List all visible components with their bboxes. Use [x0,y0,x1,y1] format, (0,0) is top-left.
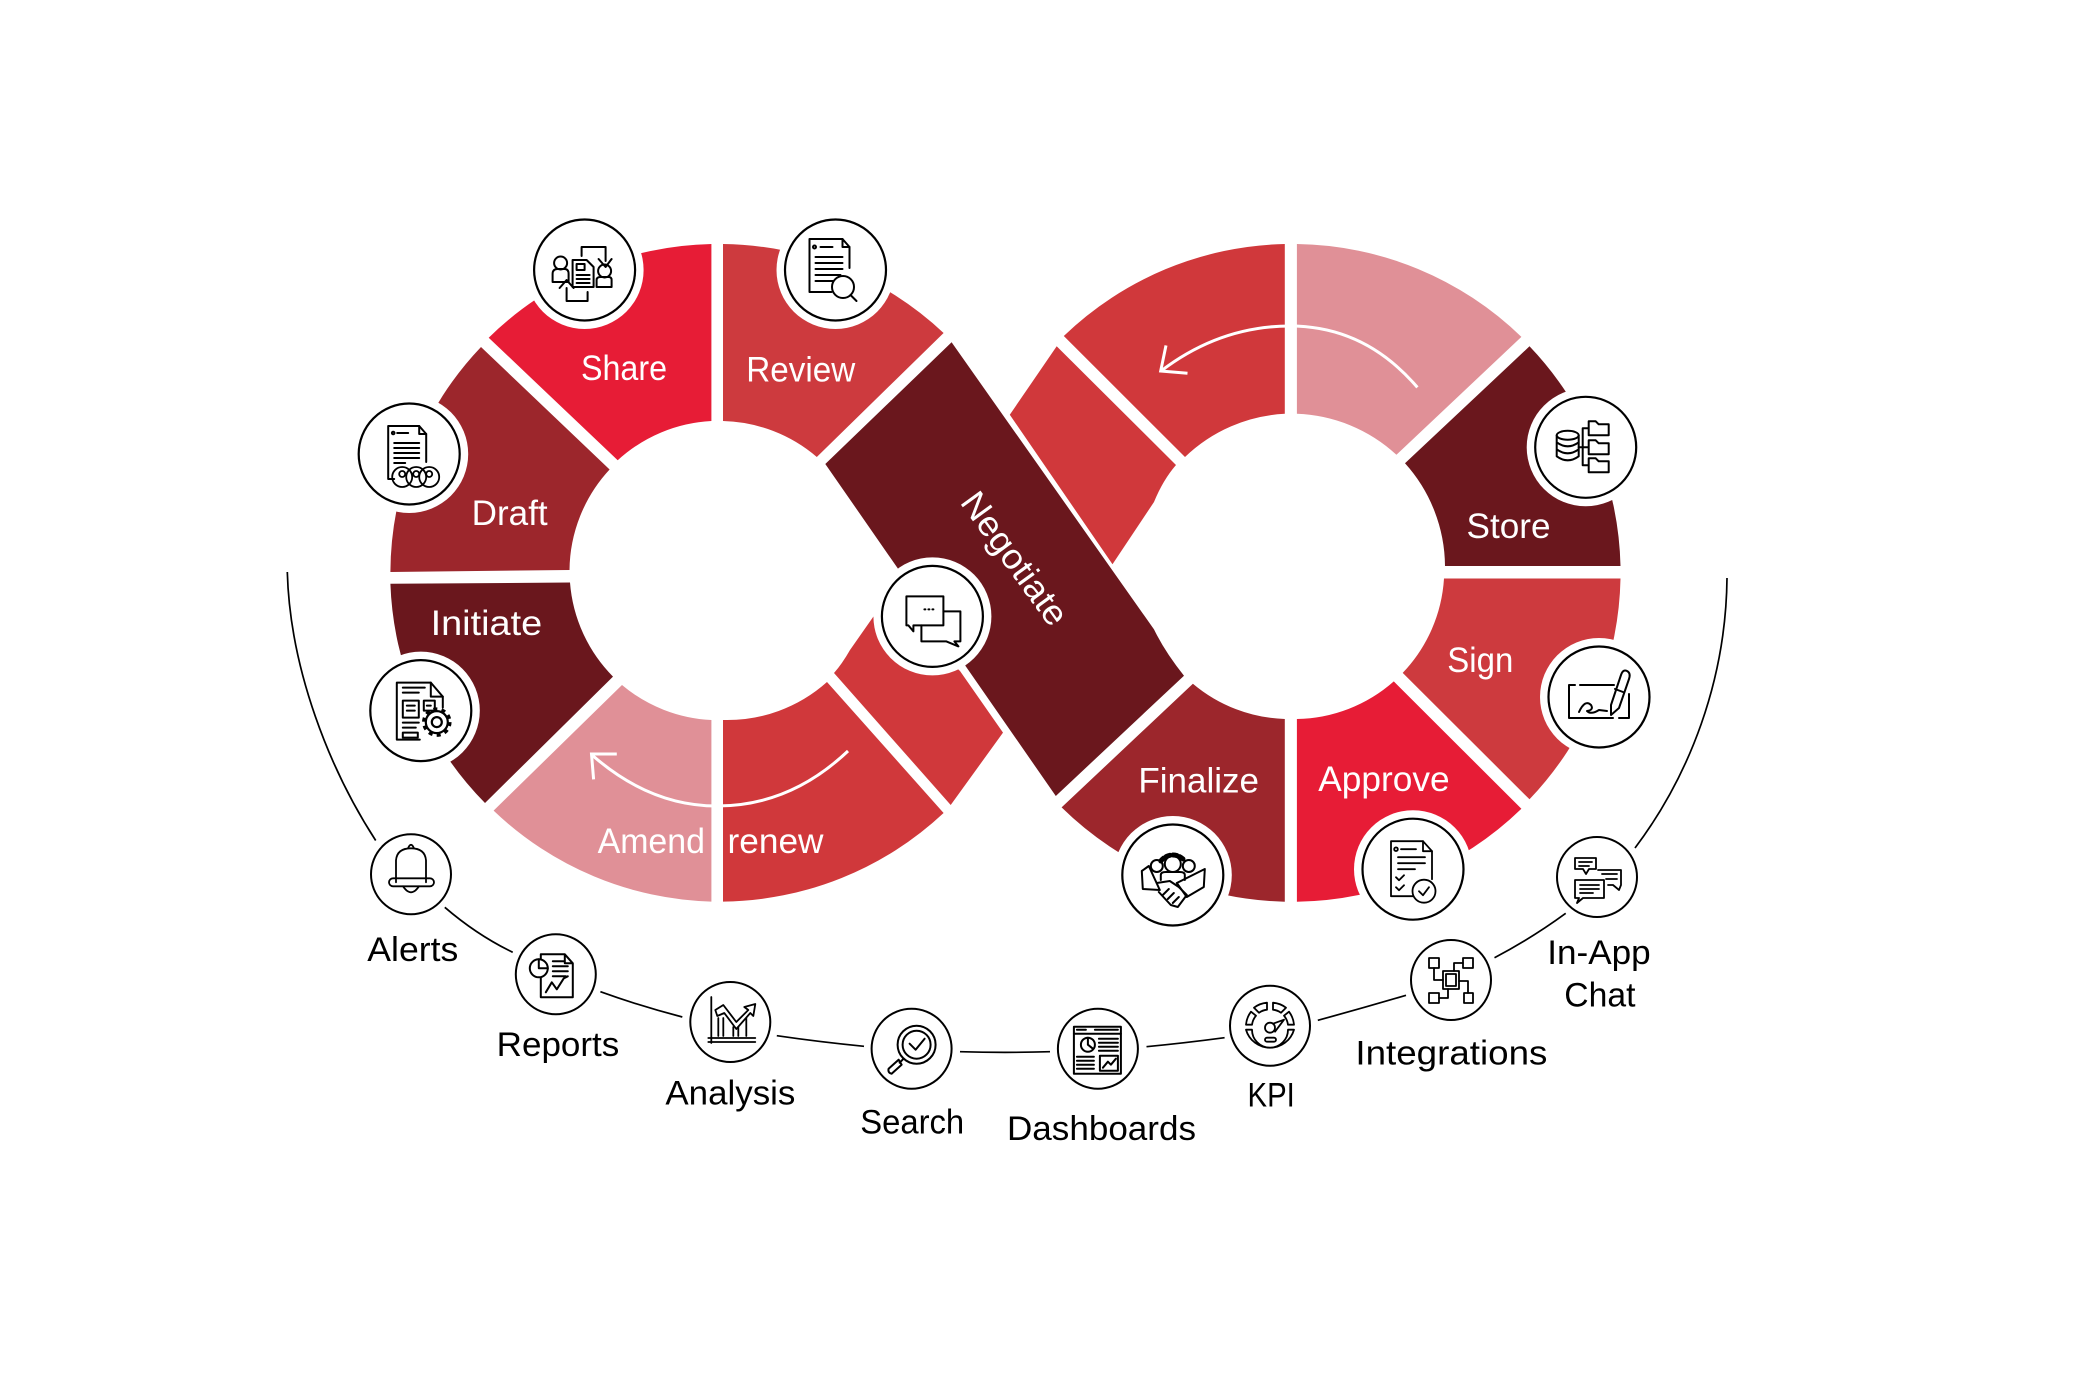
segment: Sign [1403,578,1620,799]
feature label: In-App Chat: Chat [1564,977,1636,1015]
segment: Share [489,244,711,460]
feature label: Integrations: Integrations [1355,1034,1547,1072]
feature: Integrations [1411,940,1491,1020]
segment: upper right-loop pink [1297,244,1521,455]
feature label: Alerts: Alerts [367,931,458,969]
label: Draft: Draft [472,494,548,533]
label: renew: renew [728,822,824,861]
feature: Reports [516,934,596,1014]
segment: Approve [1297,681,1521,902]
label: Amend: Amend [598,822,705,861]
label: Negotiate: Negotiate [953,484,1076,633]
feature: KPI [1230,986,1310,1066]
feature label: In-App Chat [1547,934,1651,1015]
feature label: Analysis: Analysis [665,1074,795,1112]
feature label: In-App Chat: In-App [1547,934,1651,972]
segment: upper right-loop red [1064,244,1285,457]
feature: Analysis [690,982,770,1062]
panel: left loop segments [390,244,1003,902]
label: Finalize: Finalize [1138,762,1259,801]
feature label: Reports: Reports [497,1026,619,1064]
feature: Dashboards [1058,1009,1138,1089]
segment: right-loop connector piece [1010,346,1176,564]
icon: Share, people exchanging document [526,211,644,329]
segment: Amend [494,685,711,902]
icon: Store, database and folders [1527,388,1645,506]
feature label: Search: Search [860,1103,964,1141]
icon: Approve, checklist document [1354,810,1472,928]
segment: renew [723,682,944,902]
segment: Store [1405,346,1620,566]
arrow: upper right loop [1161,326,1417,387]
segment: Draft [390,347,610,572]
feature label: KPI: KPI [1248,1077,1295,1115]
icon: Negotiate, chat bubbles [873,557,991,675]
label: Store: Store [1466,507,1550,546]
label: Share: Share [581,349,667,388]
feature: In-App Chat [1557,837,1637,917]
feature: Alerts [371,834,451,914]
feature label: Dashboards: Dashboards [1007,1110,1196,1148]
label: Initiate: Initiate [431,604,542,643]
label: Approve: Approve [1318,760,1450,799]
arrow: lower left loop [592,751,848,806]
feature: Search [872,1009,952,1089]
panel: right loop segments [1010,244,1620,902]
icon: Review, document with magnifier [776,211,894,329]
segment labels [431,349,1551,861]
icon: Draft, document with team [350,395,468,513]
segment: Initiate [390,582,613,803]
icon: Initiate, document with gear [362,652,480,770]
segment: renew connector piece [834,600,1003,805]
segment: Finalize [1062,684,1285,902]
feature arc connecting lines [287,572,1727,1052]
segment: Negotiate crossing band [825,342,1184,796]
label: Review: Review [746,350,856,389]
segment: Review [723,244,944,457]
icon: Sign, signature and pen [1540,638,1658,756]
label: Sign: Sign [1447,641,1513,680]
icon: Finalize, handshake and team [1114,816,1232,934]
